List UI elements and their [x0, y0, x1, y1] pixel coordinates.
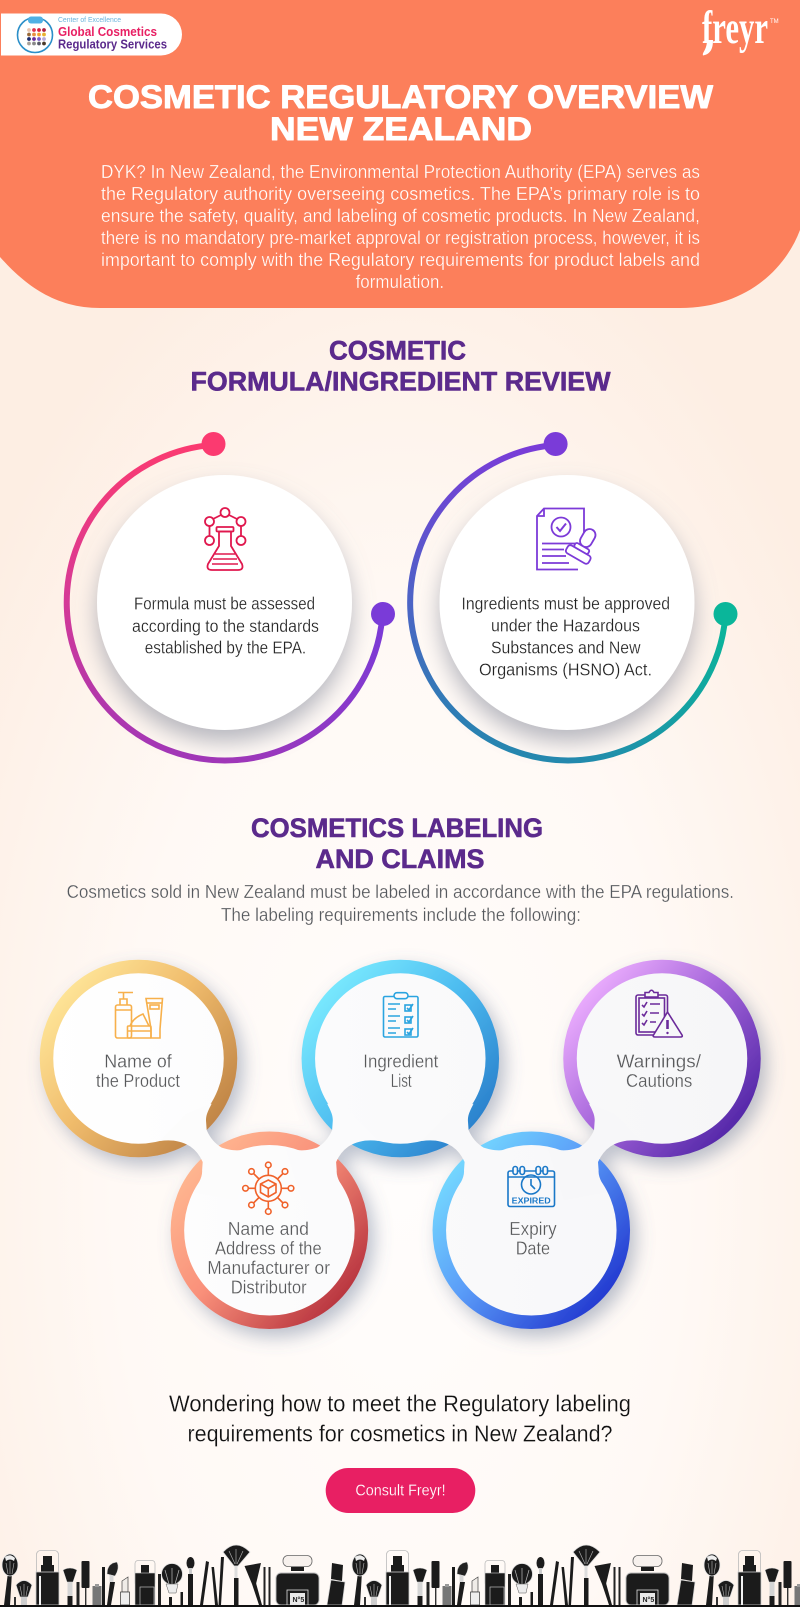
- item: manufacturer or distributor: [207, 1162, 330, 1298]
- text: formula: established by the EPA.: [145, 638, 306, 658]
- title: [88, 79, 714, 147]
- item: name of the product: [96, 992, 180, 1091]
- label: [207, 1218, 330, 1298]
- label: List: [391, 1070, 412, 1091]
- intro paragraph: DYK? In New Zealand, the Environmental Protection Authority (EPA) serves as: [101, 162, 700, 182]
- intro paragraph: formulation.: [356, 272, 444, 292]
- text: ingredients: Ingredients must be approved: [462, 594, 670, 614]
- label: [96, 1050, 180, 1091]
- intro paragraph: the Regulatory authority overseeing cosmetics. The EPA’s primary role is to: [101, 184, 700, 204]
- panel: ingredients: [410, 432, 738, 760]
- label: Name of: [104, 1050, 173, 1072]
- icon: expired calendar: EXPIRED: [512, 1196, 551, 1206]
- button: consult freyr: Consult Freyr!: [355, 1482, 446, 1500]
- text: ingredients: Substances and New: [491, 638, 641, 658]
- label: Address of the: [215, 1238, 322, 1258]
- logo: global cosmetics regulatory services: Regulatory Services: [58, 38, 167, 52]
- text: labeling intro: Cosmetics sold in New Zealand must be labeled in accordance with the EPA regulations.: [67, 881, 734, 902]
- intro paragraph: ensure the safety, quality, and labeling of cosmetic products. In New Zealand,: [101, 206, 700, 226]
- label: [617, 1050, 702, 1091]
- heading: labeling and claims: AND CLAIMS: [316, 844, 484, 874]
- label: Warnings/: [617, 1050, 702, 1072]
- logo: freyr: freyr: [702, 2, 768, 54]
- text: labeling intro: The labeling requirements include the following:: [221, 904, 581, 925]
- item: expiry date: [508, 1166, 557, 1258]
- label: the Product: [96, 1070, 180, 1091]
- logo: global cosmetics regulatory services: [1, 14, 182, 56]
- title: COSMETIC REGULATORY OVERVIEW: [88, 79, 714, 115]
- makeup tools illustration: N°5: [292, 1596, 304, 1604]
- heading: labeling and claims: COSMETICS LABELING: [251, 813, 543, 843]
- heading: formula/ingredient review: [190, 336, 611, 396]
- heading: labeling and claims: [251, 813, 543, 874]
- icon: flask with molecule: [205, 508, 246, 570]
- logo: global cosmetics regulatory services: Global Cosmetics: [58, 25, 157, 39]
- label: Date: [516, 1238, 550, 1258]
- item: warnings: [617, 990, 702, 1091]
- text: ingredients: under the Hazardous: [491, 616, 640, 636]
- intro paragraph: there is no mandatory pre-market approval or registration process, however, it is: [101, 228, 700, 248]
- header banner: [0, 0, 800, 308]
- icon: checklist clipboard: [384, 993, 418, 1037]
- label: Cautions: [626, 1070, 692, 1091]
- ring: pink to purple arc: [67, 432, 395, 761]
- logo: freyr: TM: [770, 19, 779, 25]
- icon: document with stamp: [537, 508, 604, 570]
- panel: formula: [67, 432, 395, 761]
- label: Name and: [228, 1218, 309, 1239]
- text: labeling intro: [67, 881, 734, 925]
- call to action text: Wondering how to meet the Regulatory labeling: [169, 1390, 631, 1416]
- ring: purple to teal arc: [410, 432, 738, 760]
- text: formula: according to the standards: [132, 616, 319, 636]
- heading: formula/ingredient review: FORMULA/INGREDIENT REVIEW: [190, 366, 611, 396]
- label: [363, 1050, 438, 1091]
- call to action text: [169, 1390, 631, 1446]
- label: Ingredient: [363, 1050, 438, 1072]
- icon: clipboard warning: [636, 990, 682, 1037]
- item: ingredient list: [363, 993, 438, 1091]
- text: formula: Formula must be assessed: [134, 594, 315, 614]
- label: Manufacturer or: [207, 1257, 330, 1278]
- text: formula: [132, 594, 319, 658]
- intro paragraph: important to comply with the Regulatory requirements for product labels and: [101, 250, 700, 270]
- call to action text: requirements for cosmetics in New Zealand?: [188, 1420, 612, 1446]
- label: Distributor: [231, 1276, 307, 1298]
- button: consult freyr: [326, 1468, 475, 1513]
- heading: formula/ingredient review: COSMETIC: [329, 336, 466, 366]
- icon: network box: [243, 1162, 294, 1214]
- makeup tools illustration: [0, 1545, 800, 1607]
- intro paragraph: [101, 162, 700, 292]
- text: ingredients: Organisms (HSNO) Act.: [479, 660, 652, 680]
- label: [509, 1218, 557, 1258]
- logo: global cosmetics regulatory services: Center of Excellence: [58, 15, 121, 24]
- label: Expiry: [509, 1218, 557, 1239]
- text: ingredients: [462, 594, 670, 680]
- makeup tools illustration: N°5: [642, 1596, 654, 1604]
- title: NEW ZEALAND: [270, 111, 532, 147]
- icon: cosmetic bottles: [116, 992, 162, 1038]
- linked circle chain: [46, 966, 754, 1322]
